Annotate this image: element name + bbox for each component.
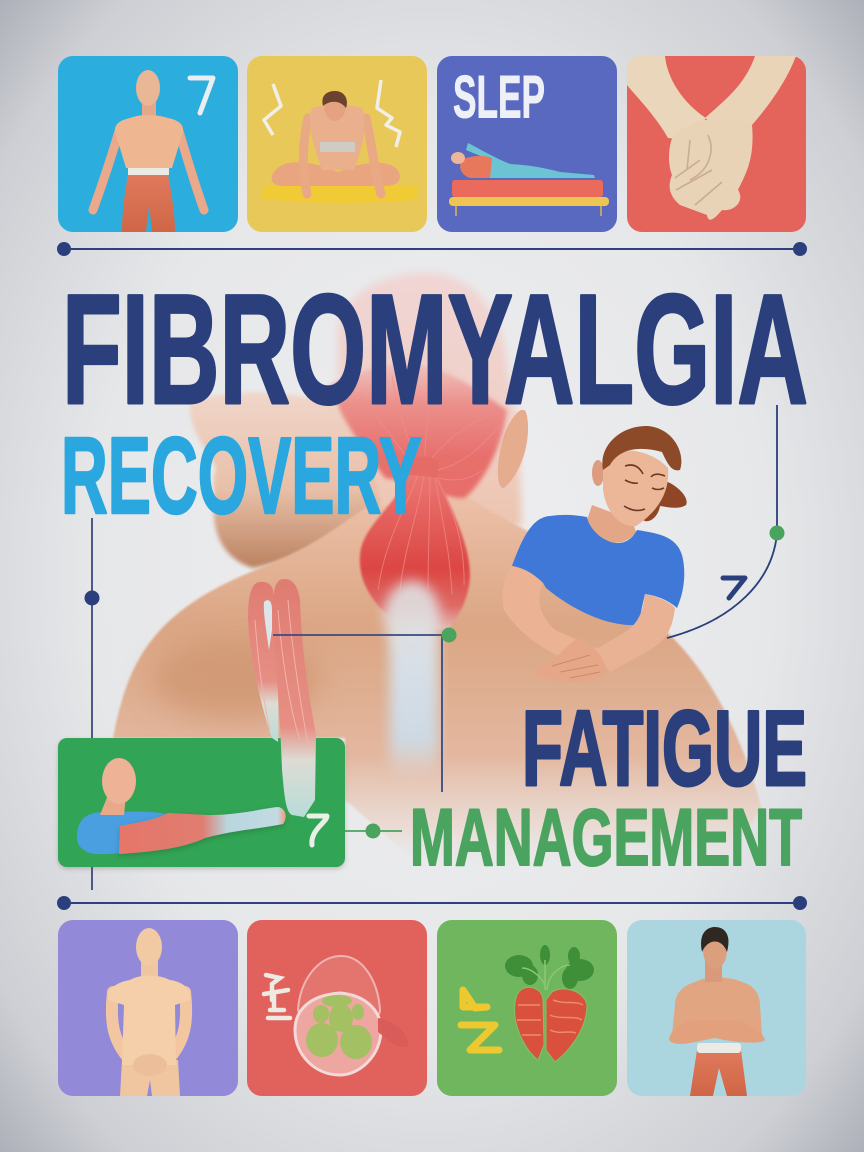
head [136,70,160,106]
hands [531,640,606,683]
arm [119,807,286,854]
hair [701,927,729,952]
eyes and mouth [624,465,665,510]
central back figure illustration [113,273,762,865]
bed legs [456,206,601,216]
panel: green arm card [58,738,345,867]
arms [93,128,204,210]
sleeping figure [466,143,595,178]
ear [592,460,604,486]
pointer line to muscle [273,635,442,792]
neck [705,960,722,982]
vertical muscle graphic [248,579,316,817]
lobe folds [517,1000,583,1035]
jar upper [298,956,380,1025]
left red lobe [515,987,544,1060]
icon: seven by woman [723,578,745,598]
green node on pointer [442,628,456,642]
neck [142,100,156,124]
clasped hands [669,119,753,220]
right arm [595,594,675,672]
panel: stomach card [247,920,427,1096]
label: SLEP [453,64,545,130]
right red lobe [546,989,587,1062]
left arm [627,56,706,140]
legs [272,162,400,186]
ponytail muscle [360,468,470,630]
panel: plant card [437,920,617,1096]
shoulder shade [150,640,320,720]
leaves [505,945,594,989]
hair [602,426,681,470]
side handle [378,1018,408,1047]
neck [587,505,636,543]
figure shirt [460,156,492,178]
finger lines [675,135,722,205]
back hair bun [643,480,687,521]
connector nodes [84,526,784,838]
left arm [503,566,605,665]
panel: hands card [627,56,806,232]
crossed arms [669,1020,765,1044]
torso [672,978,762,1035]
waistband [128,168,169,175]
panel: pain location card [58,56,238,232]
neck [141,958,158,982]
top divider [57,242,807,256]
panel: sleep card [437,56,617,232]
subtitle: recovery: RECOVERY [61,415,422,537]
hair [322,91,347,108]
figure neck [100,795,126,815]
head [703,931,727,969]
legs [120,1060,180,1096]
cloth [320,142,355,152]
mat [262,184,419,203]
white letters [264,975,290,1018]
fibres [255,600,308,745]
face [603,451,668,526]
arms [303,118,381,194]
connector lines [92,405,777,890]
tendon highlight [264,600,272,650]
right arm [705,56,796,145]
finger lines [552,655,600,678]
small white seven [309,816,327,845]
stems [522,960,570,990]
clasped hands [133,1054,167,1076]
woman massaging figure [503,426,687,683]
muscle left lobe [248,582,278,742]
arms [112,992,186,1060]
figure shoulder [77,812,172,854]
shorts [690,1050,747,1096]
green fruits [306,995,372,1059]
panel: standing figure card [58,920,238,1096]
bottom divider [57,896,807,910]
jar bowl [295,993,381,1075]
lightning right [377,80,400,147]
head [136,928,162,966]
seven [190,78,213,113]
head [324,91,346,121]
torso [115,115,183,168]
white spine column [384,581,440,780]
panel: crossed arms figure card [627,920,806,1096]
ponytail knot [406,457,439,478]
lightning left [264,84,281,135]
muscle fan [330,364,507,498]
body [108,976,190,1065]
torso [310,105,364,170]
waistband [697,1043,741,1053]
figure head [451,152,465,164]
mattress [452,180,603,197]
muscle right lobe [273,579,316,817]
ear [498,410,528,488]
shirt [512,515,684,625]
figure head [102,758,136,804]
torso and shoulders [113,498,762,865]
shorts [122,175,175,232]
yellow letters [461,990,499,1050]
muscle fibres [360,375,500,595]
head back [337,273,522,530]
panel: sitting pain card [247,56,427,232]
blurred face [190,392,380,568]
bed frame [449,197,609,206]
